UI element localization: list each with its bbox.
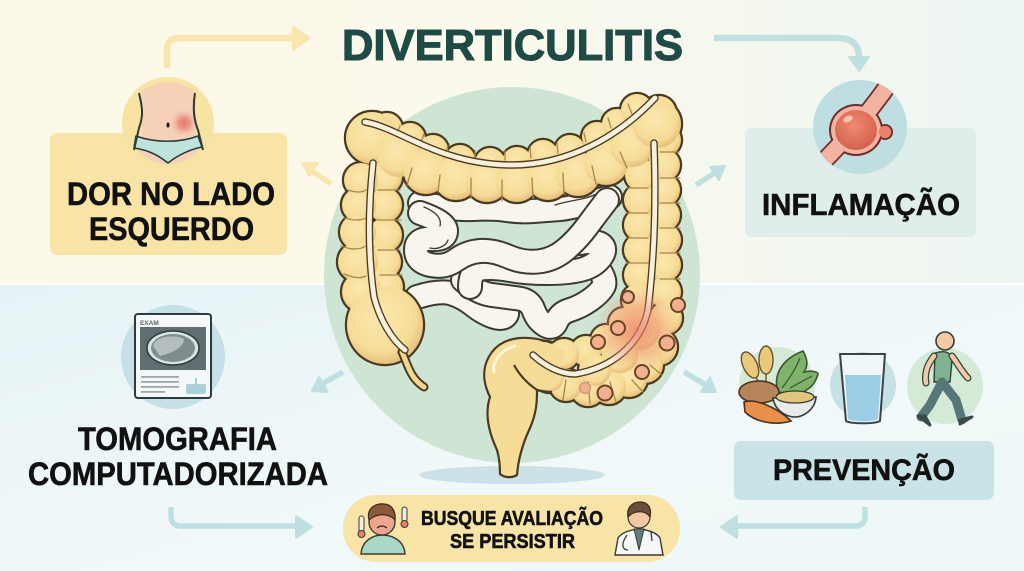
illustration: colon and small intestine [338, 94, 685, 477]
icon: abdomen with pain spot [122, 77, 214, 164]
panel: inflammation [745, 78, 976, 237]
taenia bands [365, 98, 655, 374]
icon: fibre foods [738, 346, 818, 423]
pain label box [50, 133, 287, 255]
callout: seek evaluation [343, 495, 680, 562]
panel: left side pain [50, 77, 287, 255]
background: upper zone [0, 0, 1024, 283]
arrow: prevention to callout [721, 507, 865, 538]
appendix [402, 352, 424, 387]
prevention label box [734, 441, 994, 500]
icon: doctor [615, 502, 663, 555]
inflammation label text: INFLAMAÇÃO [762, 187, 960, 222]
small arrow: colon to prevention [684, 372, 716, 392]
small arrow: colon to inflammation [696, 166, 725, 185]
pain label text: DOR NO LADO [67, 176, 275, 212]
colon silhouette [338, 94, 682, 406]
callout text: BUSQUE AVALIAÇÃO [421, 507, 603, 530]
callout pill [343, 495, 680, 562]
tomography label [28, 421, 328, 492]
panel: prevention [734, 332, 994, 500]
tomography label: COMPUTADORIZADA [28, 456, 328, 492]
ground shadow under colon [419, 466, 605, 484]
icon: walking person [907, 332, 983, 425]
inflammation label box [745, 128, 976, 237]
colon fold creases [341, 104, 680, 404]
small arrow: colon to pain [302, 163, 331, 184]
diverticula pouches [580, 291, 685, 400]
callout text: SE PERSISTIR [450, 530, 575, 553]
icon: glass of water [830, 352, 896, 423]
rectum [484, 338, 566, 477]
tomography label: TOMOGRAFIA [78, 421, 277, 457]
pain label text: ESQUERDO [89, 211, 254, 247]
icon: CT exam report: EXAM [140, 320, 159, 327]
panel: tomography [28, 305, 328, 492]
icon: CT exam report [121, 305, 225, 409]
arrow: tomography to callout [171, 507, 312, 538]
prevention label text: PREVENÇÃO [773, 453, 955, 487]
small intestine [416, 194, 610, 327]
icon: sick person with thermometers [358, 504, 408, 554]
arrow: pain to title [167, 27, 310, 68]
small arrow: colon to tomography [312, 372, 343, 392]
central green circle [324, 87, 700, 463]
icon: inflamed intestine segment [813, 78, 907, 174]
title: DIVERTICULITIS [342, 21, 683, 70]
arrow: title to inflammation [714, 38, 869, 71]
inflamed area [595, 288, 679, 372]
background: lower zone [0, 285, 1024, 571]
pain label text [67, 176, 275, 247]
callout text [421, 507, 603, 553]
